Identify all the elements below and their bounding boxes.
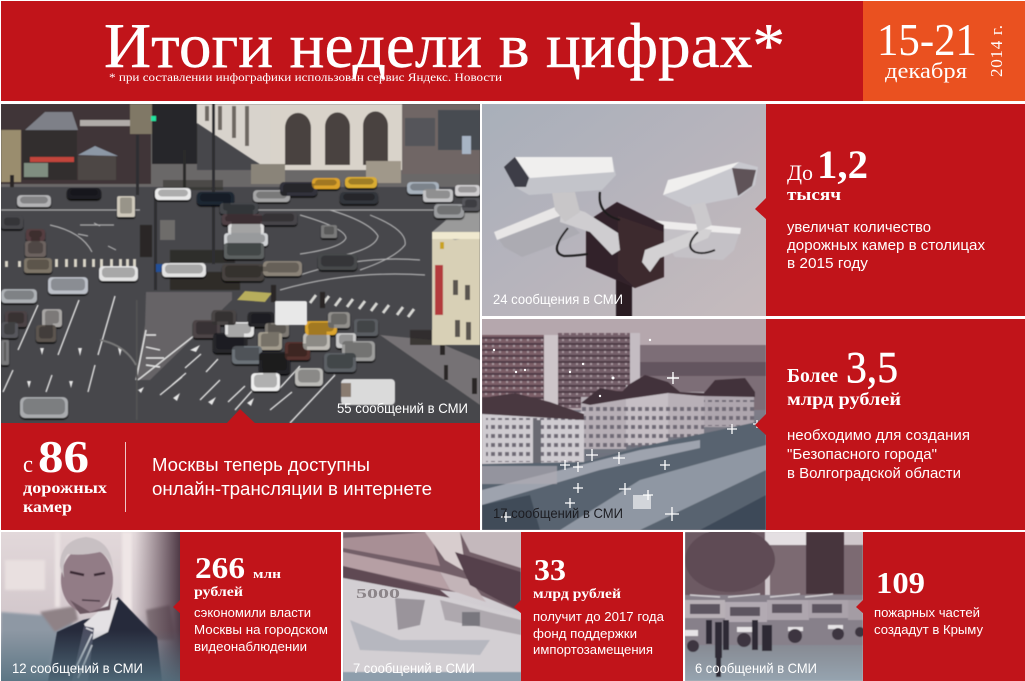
description text: увеличат количество [787,219,931,236]
number: 33: 33 [534,552,566,587]
number: 3,5 [787,343,901,409]
description text: импортозамещения [533,642,653,657]
month: декабря [885,58,967,83]
photo: fire trucks [685,528,865,681]
photo: official portrait [1,532,180,681]
description text [194,605,328,654]
number: 109: 109 [876,565,925,600]
description text: создадут в Крыму [874,622,983,637]
number: 266: млн [253,566,282,581]
description text [787,219,985,272]
description text: получит до 2017 года [533,609,665,624]
photo: banknotes [343,532,521,681]
description text: дорожных камер в столицах [787,237,985,254]
description text: видеонаблюдении [194,639,307,654]
number: 1,2: тысяч [787,185,841,204]
description text [874,605,983,637]
panel: 33 billion [514,532,683,681]
description text: "Безопасного города" [787,446,937,463]
footnote: * при составлении инфографики использован сервис Яндекс. Новости [109,70,503,84]
panel: 1.2 thousand [755,104,1025,316]
panel: 3.5 billion [755,319,1025,530]
description text: Москвы на городском [194,622,328,637]
description text [787,427,970,482]
description text: онлайн-трансляции в интернете [152,479,432,499]
number: 86: с [23,452,33,478]
photo: surveillance cameras [482,104,766,320]
description text: необходимо для создания [787,427,970,444]
panel: 109 fire stations [856,532,1025,681]
date range: 15-21 [877,14,977,65]
year: 2014 г. [987,25,1006,77]
number: 1,2: 1,2 [817,142,868,187]
arrow pointer left [514,599,522,614]
arrow pointer left [856,599,864,614]
caption: 55 mentions: 55 сообщений в СМИ [337,400,468,416]
title: Итоги недели в цифрах* [104,10,785,81]
caption: 7 mentions: 7 сообщений в СМИ [353,660,475,676]
number: 33: млрд рублей [533,587,621,602]
number: 1,2 [787,142,868,204]
number: 3,5: Более [787,365,838,387]
date panel [863,1,1025,101]
number: 86: дорожных [23,480,107,497]
photo: Moscow crossroads [1,104,480,423]
description text [152,455,432,499]
arrow pointer left [173,599,181,614]
number: 266 [194,550,282,600]
photo: Volgograd city [482,319,766,530]
number: 86: 86 [38,431,89,482]
number: 33 [533,552,621,602]
caption: 6 mentions: 6 сообщений в СМИ [695,660,817,676]
description text: фонд поддержки [533,626,637,641]
number: 266: 266 [195,550,245,585]
description text [533,609,665,657]
caption: 24 mentions: 24 сообщения в СМИ [493,291,623,307]
description text: сэкономили власти [194,605,311,620]
number: 86 [23,431,107,516]
header panel [1,1,863,101]
description text: в 2015 году [787,255,868,272]
description text: в Волгоградской области [787,465,961,482]
panel: 86 cameras [1,409,480,530]
arrow pointer up [226,409,256,424]
number: 1,2: До [787,160,813,185]
caption: 12 mentions: 12 сообщений в СМИ [12,660,143,676]
description text: пожарных частей [874,605,980,620]
panel: 266 million [173,532,341,681]
arrow pointer left [755,197,767,220]
number: 86: камер [23,499,72,516]
number: 3,5: 3,5 [846,343,898,392]
description text: Москвы теперь доступны [152,455,370,475]
number: 266: рублей [194,585,243,600]
number: 3,5: млрд рублей [787,389,901,409]
banknote denomination: 5000 [356,587,400,602]
arrow pointer left [755,413,767,436]
caption: 17 mentions: 17 сообщений в СМИ [493,505,623,521]
